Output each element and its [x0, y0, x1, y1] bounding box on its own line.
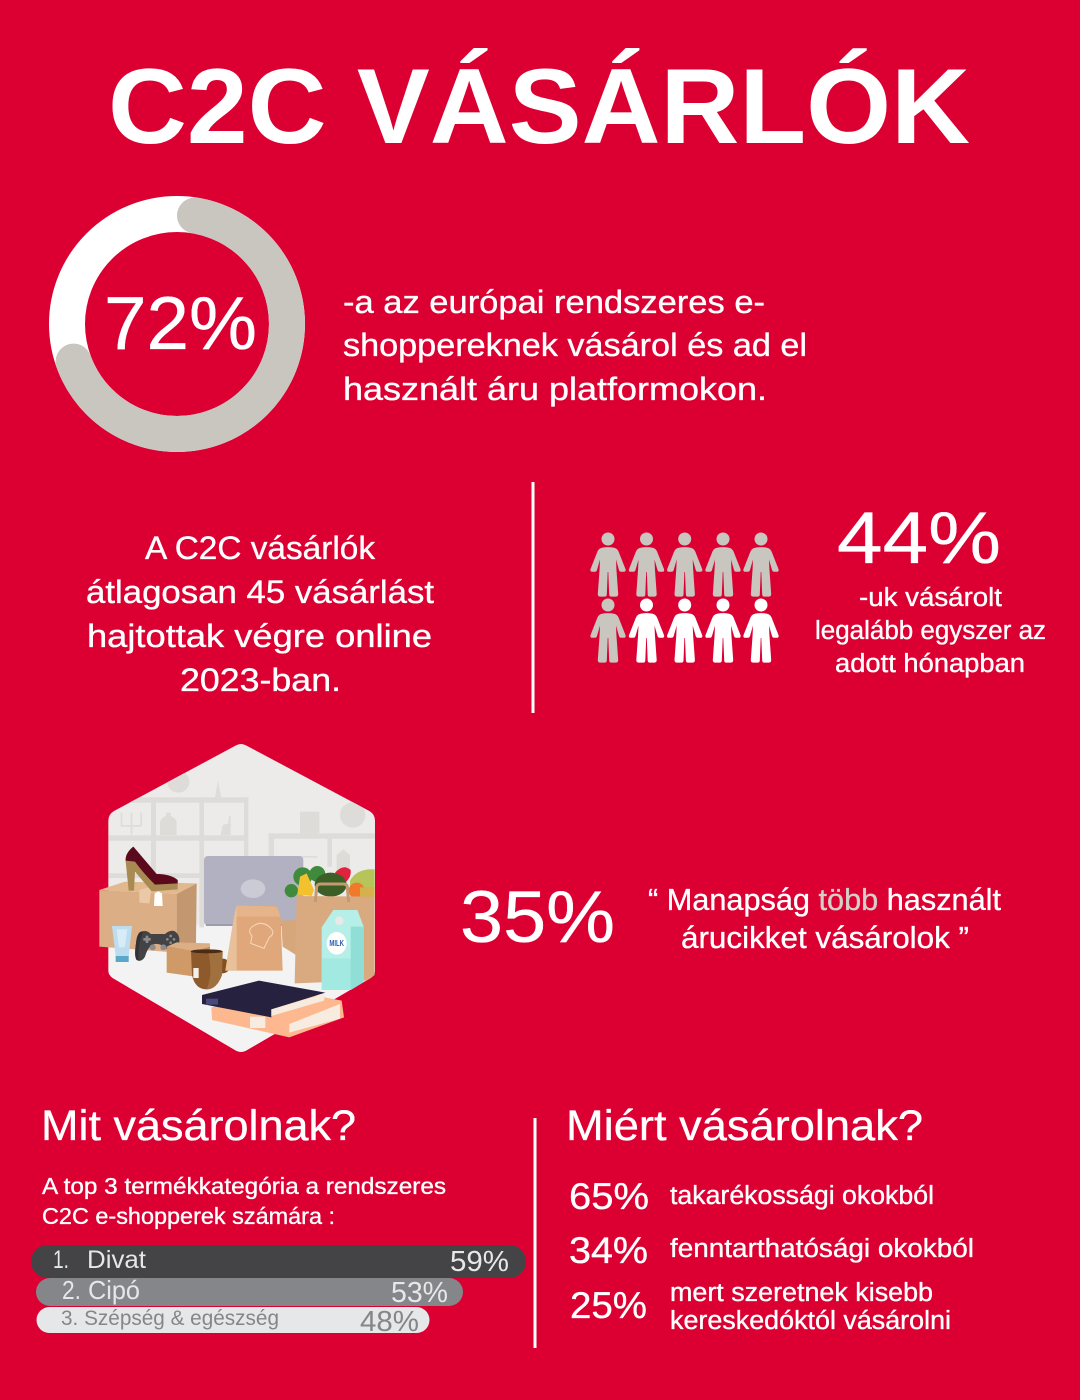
- reason: sustainability: [569, 1230, 974, 1271]
- quote: “ Manapság több használt: [648, 882, 1001, 917]
- stat: 35%: 35%: [460, 877, 615, 958]
- small box behind grocery bag: [281, 920, 297, 955]
- icon: people pictogram 44%: [590, 532, 779, 663]
- grocery bag: [295, 884, 375, 983]
- bar chart: top 3 categories: [31, 1245, 526, 1338]
- bar: Cipó 53%: 2.: [62, 1275, 81, 1305]
- bar: Cipó 53%: 53%: [391, 1277, 448, 1309]
- reason: smaller merchants: mert szeretnek kisebb: [670, 1279, 933, 1307]
- mug: [191, 949, 230, 989]
- bar: Szépség & egészség 48%: 3. Szépség & egészség: [61, 1307, 279, 1330]
- text block: bought at least once: -uk vásárolt: [859, 584, 1002, 612]
- text block: European e-shoppers: -a az európai rendszeres e-: [343, 284, 765, 320]
- reason: sustainability: fenntarthatósági okokból: [670, 1235, 974, 1263]
- text block: average purchases: 2023-ban.: [180, 662, 341, 698]
- donut chart: 72%: 72%: [104, 281, 257, 365]
- bar: Divat 59%: 1.: [53, 1246, 69, 1274]
- quote: [648, 882, 1001, 955]
- text block: average purchases: hajtottak végre online: [87, 618, 432, 654]
- quote: árucikket vásárolok ”: [681, 920, 969, 955]
- heading: why they buy: Miért vásárolnak?: [566, 1102, 923, 1150]
- illustration: shopping goods in hexagon: [99, 744, 375, 1055]
- bar: Cipó 53%: [36, 1275, 463, 1309]
- text block: average purchases: átlagosan 45 vásárlást: [86, 574, 434, 610]
- reason: savings: [569, 1176, 934, 1217]
- bar: Szépség & egészség 48%: 48%: [360, 1306, 419, 1338]
- reason: sustainability: 34%: [569, 1230, 648, 1271]
- text block: bought at least once: adott hónapban: [835, 650, 1025, 678]
- takeaway bag: [225, 905, 283, 971]
- reason: savings: takarékossági okokból: [670, 1182, 934, 1210]
- text block: European e-shoppers: shoppereknek vásárol és ad el: [343, 327, 807, 363]
- bar: Szépség & egészség 48%: [36, 1306, 430, 1338]
- laptop: [204, 856, 303, 926]
- text block: bought at least once: [815, 584, 1046, 678]
- bar: Divat 59%: 59%: [450, 1246, 509, 1278]
- tube: [112, 926, 132, 962]
- milk carton: MILK: [329, 939, 344, 948]
- reason: savings: 65%: [569, 1176, 649, 1217]
- title: C2C VÁSÁRLÓK: [108, 46, 970, 166]
- game controller: [135, 931, 179, 961]
- reason: smaller merchants: 25%: [570, 1285, 647, 1326]
- text block: average purchases: A C2C vásárlók: [145, 530, 376, 566]
- text block: European e-shoppers: [343, 284, 807, 407]
- donut chart: 72%: [67, 214, 287, 434]
- bar: Cipó 53%: Cipó: [88, 1275, 140, 1305]
- reason: smaller merchants: [570, 1279, 951, 1335]
- vegetables: [285, 866, 375, 899]
- text block: top 3 categories: [42, 1173, 446, 1229]
- bar: Divat 59%: [31, 1245, 526, 1278]
- text block: bought at least once: legalább egyszer az: [815, 617, 1046, 645]
- reason: smaller merchants: kereskedóktól vásárolni: [670, 1307, 951, 1335]
- cardboard box: [99, 882, 197, 953]
- text block: top 3 categories: A top 3 termékkategória a rendszeres: [42, 1173, 446, 1199]
- books: [202, 981, 344, 1037]
- milk carton: [322, 910, 364, 990]
- stat: 44%: 44%: [837, 498, 1001, 579]
- text block: top 3 categories: C2C e-shopperek számára :: [42, 1203, 335, 1229]
- high heel shoe: [126, 847, 178, 906]
- small box: [167, 942, 210, 977]
- bar: Divat 59%: Divat: [87, 1246, 146, 1274]
- text block: average purchases: [86, 530, 434, 698]
- heading: what they buy: Mit vásárolnak?: [41, 1102, 356, 1150]
- text block: European e-shoppers: használt áru platformokon.: [343, 371, 767, 407]
